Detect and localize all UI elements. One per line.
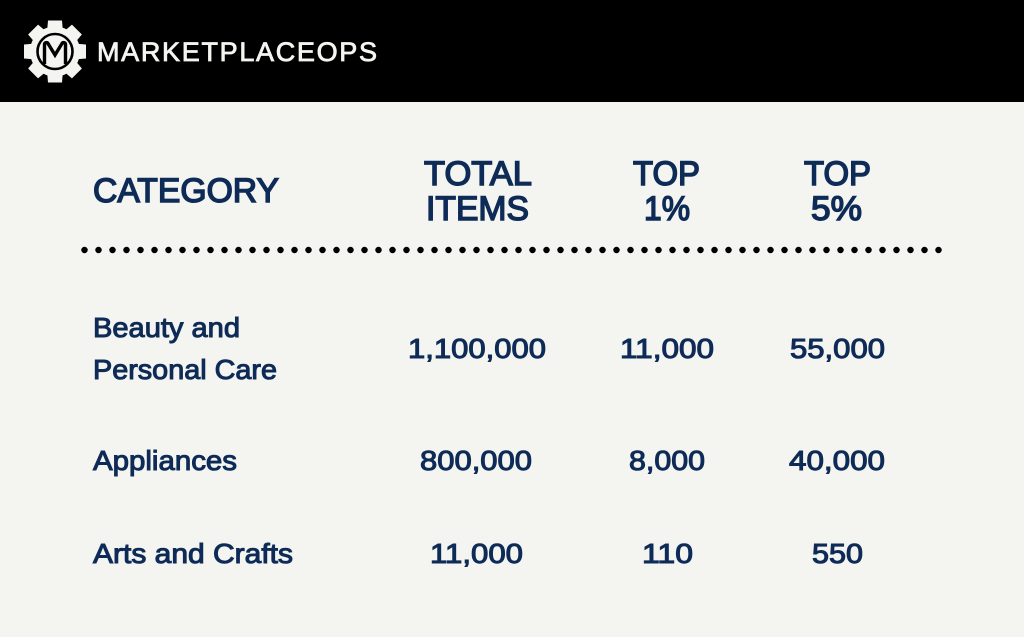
row: appliances xyxy=(93,445,885,476)
row: beauty and personal care: 11,000 xyxy=(620,333,714,364)
row: arts and crafts: 110 xyxy=(642,538,693,569)
row: appliances: 8,000 xyxy=(629,445,705,476)
heading: top 1% xyxy=(633,155,700,228)
row: appliances: 800,000 xyxy=(420,445,532,476)
brand name: MARKETPLACEOPS xyxy=(97,37,377,67)
row: beauty and personal care: 55,000 xyxy=(790,333,885,364)
row: arts and crafts: 11,000 xyxy=(430,538,523,569)
heading: total items: TOTAL xyxy=(424,155,532,193)
row: appliances: 40,000 xyxy=(789,445,885,476)
header band xyxy=(0,0,1024,102)
heading: top 5%: TOP xyxy=(804,155,871,193)
row: arts and crafts: 550 xyxy=(812,538,863,569)
heading: top 1%: TOP xyxy=(633,155,700,193)
icon: gear logo xyxy=(24,20,86,82)
row: arts and crafts: Arts and Crafts xyxy=(93,538,293,569)
row: beauty and personal care: Beauty and xyxy=(93,312,240,343)
table headings xyxy=(93,155,871,228)
heading: top 5% xyxy=(804,155,871,228)
row: arts and crafts xyxy=(93,538,863,569)
heading: category: CATEGORY xyxy=(93,172,279,210)
dotted divider xyxy=(84,247,940,253)
row: beauty and personal care: Personal Care xyxy=(93,354,277,385)
heading: top 5%: 5% xyxy=(811,190,862,228)
row: appliances: Appliances xyxy=(93,445,237,476)
heading: total items xyxy=(424,155,532,228)
row: beauty and personal care: 1,100,000 xyxy=(408,333,546,364)
heading: top 1%: 1% xyxy=(644,190,690,228)
row: beauty and personal care xyxy=(93,312,885,385)
heading: total items: ITEMS xyxy=(426,190,529,228)
